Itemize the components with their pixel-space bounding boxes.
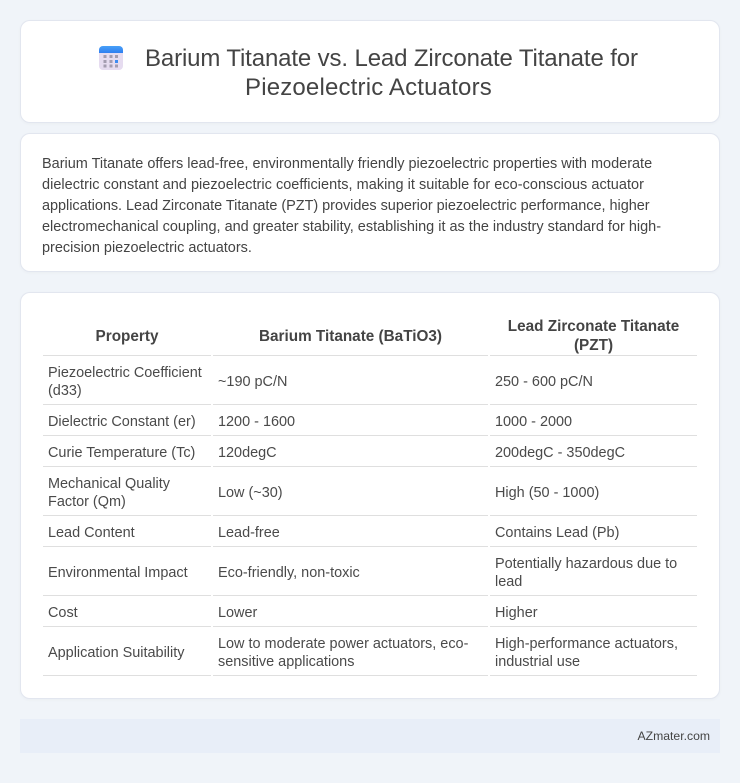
row: curie: Curie Temperature (Tc) xyxy=(48,445,195,461)
row: d33: (d33) xyxy=(48,383,82,399)
comparison table: 120degC xyxy=(218,445,277,461)
title: Piezoelectric Actuators xyxy=(245,74,492,101)
intro text xyxy=(42,156,661,256)
intro text: electromechanical coupling, and greater stability, establishing it as the industry standard for high- xyxy=(42,219,661,235)
title card xyxy=(20,20,720,123)
row: cost: Cost xyxy=(48,605,78,621)
comparison table: High (50 - 1000) xyxy=(495,485,599,501)
comparison table: 200degC - 350degC xyxy=(495,445,625,461)
row: quality factor: Mechanical Quality xyxy=(48,476,170,492)
header: PZT xyxy=(508,318,679,354)
row: lead: Lead Content xyxy=(48,525,135,541)
comparison table: 1000 - 2000 xyxy=(495,414,572,430)
comparison table: 250 - 600 pC/N xyxy=(495,374,593,390)
comparison table: High-performance actuators, xyxy=(495,636,678,652)
comparison table: lead xyxy=(495,574,522,590)
footer credit: AZmater.com xyxy=(638,729,710,743)
row: environment: Environmental Impact xyxy=(48,565,188,581)
title: Barium Titanate vs. Lead Zirconate Titanate for xyxy=(145,45,638,72)
comparison table: Lead-free xyxy=(218,525,280,541)
comparison table: sensitive applications xyxy=(218,654,354,670)
comparison table: ~190 pC/N xyxy=(218,374,287,390)
header: PZT: (PZT) xyxy=(574,337,613,354)
comparison table: Low to moderate power actuators, eco- xyxy=(218,636,468,652)
header: PZT: Lead Zirconate Titanate xyxy=(508,318,679,335)
row: d33 xyxy=(48,365,202,399)
intro text: dielectric constant and piezoelectric coefficients, making it suitable for eco-conscious actuator xyxy=(42,177,644,193)
comparison table: Eco-friendly, non-toxic xyxy=(218,565,360,581)
row: quality factor xyxy=(48,476,170,510)
intro text: Barium Titanate offers lead-free, environmentally friendly piezoelectric properties with moderate xyxy=(42,156,652,172)
row: dielectric: Dielectric Constant (er) xyxy=(48,414,196,430)
icon: calendar xyxy=(99,46,123,70)
comparison table: Contains Lead (Pb) xyxy=(495,525,619,541)
comparison table: Higher xyxy=(495,605,538,621)
intro text: precision piezoelectric actuators. xyxy=(42,240,252,256)
table card xyxy=(20,292,720,699)
row: application: Application Suitability xyxy=(48,645,184,661)
comparison table: Low (~30) xyxy=(218,485,283,501)
title xyxy=(145,45,638,101)
comparison table: industrial use xyxy=(495,654,580,670)
footer bar xyxy=(20,719,720,753)
comparison table: 1200 - 1600 xyxy=(218,414,295,430)
comparison table: Potentially hazardous due to xyxy=(495,556,677,572)
intro text: applications. Lead Zirconate Titanate (PZT) provides superior piezoelectric performance, higher xyxy=(42,198,650,214)
row: d33: Piezoelectric Coefficient xyxy=(48,365,202,381)
header: barium titanate: Barium Titanate (BaTiO3) xyxy=(259,328,442,345)
comparison table: Lower xyxy=(218,605,257,621)
row: quality factor: Factor (Qm) xyxy=(48,494,126,510)
header: property: Property xyxy=(96,328,158,345)
intro card xyxy=(20,133,720,272)
